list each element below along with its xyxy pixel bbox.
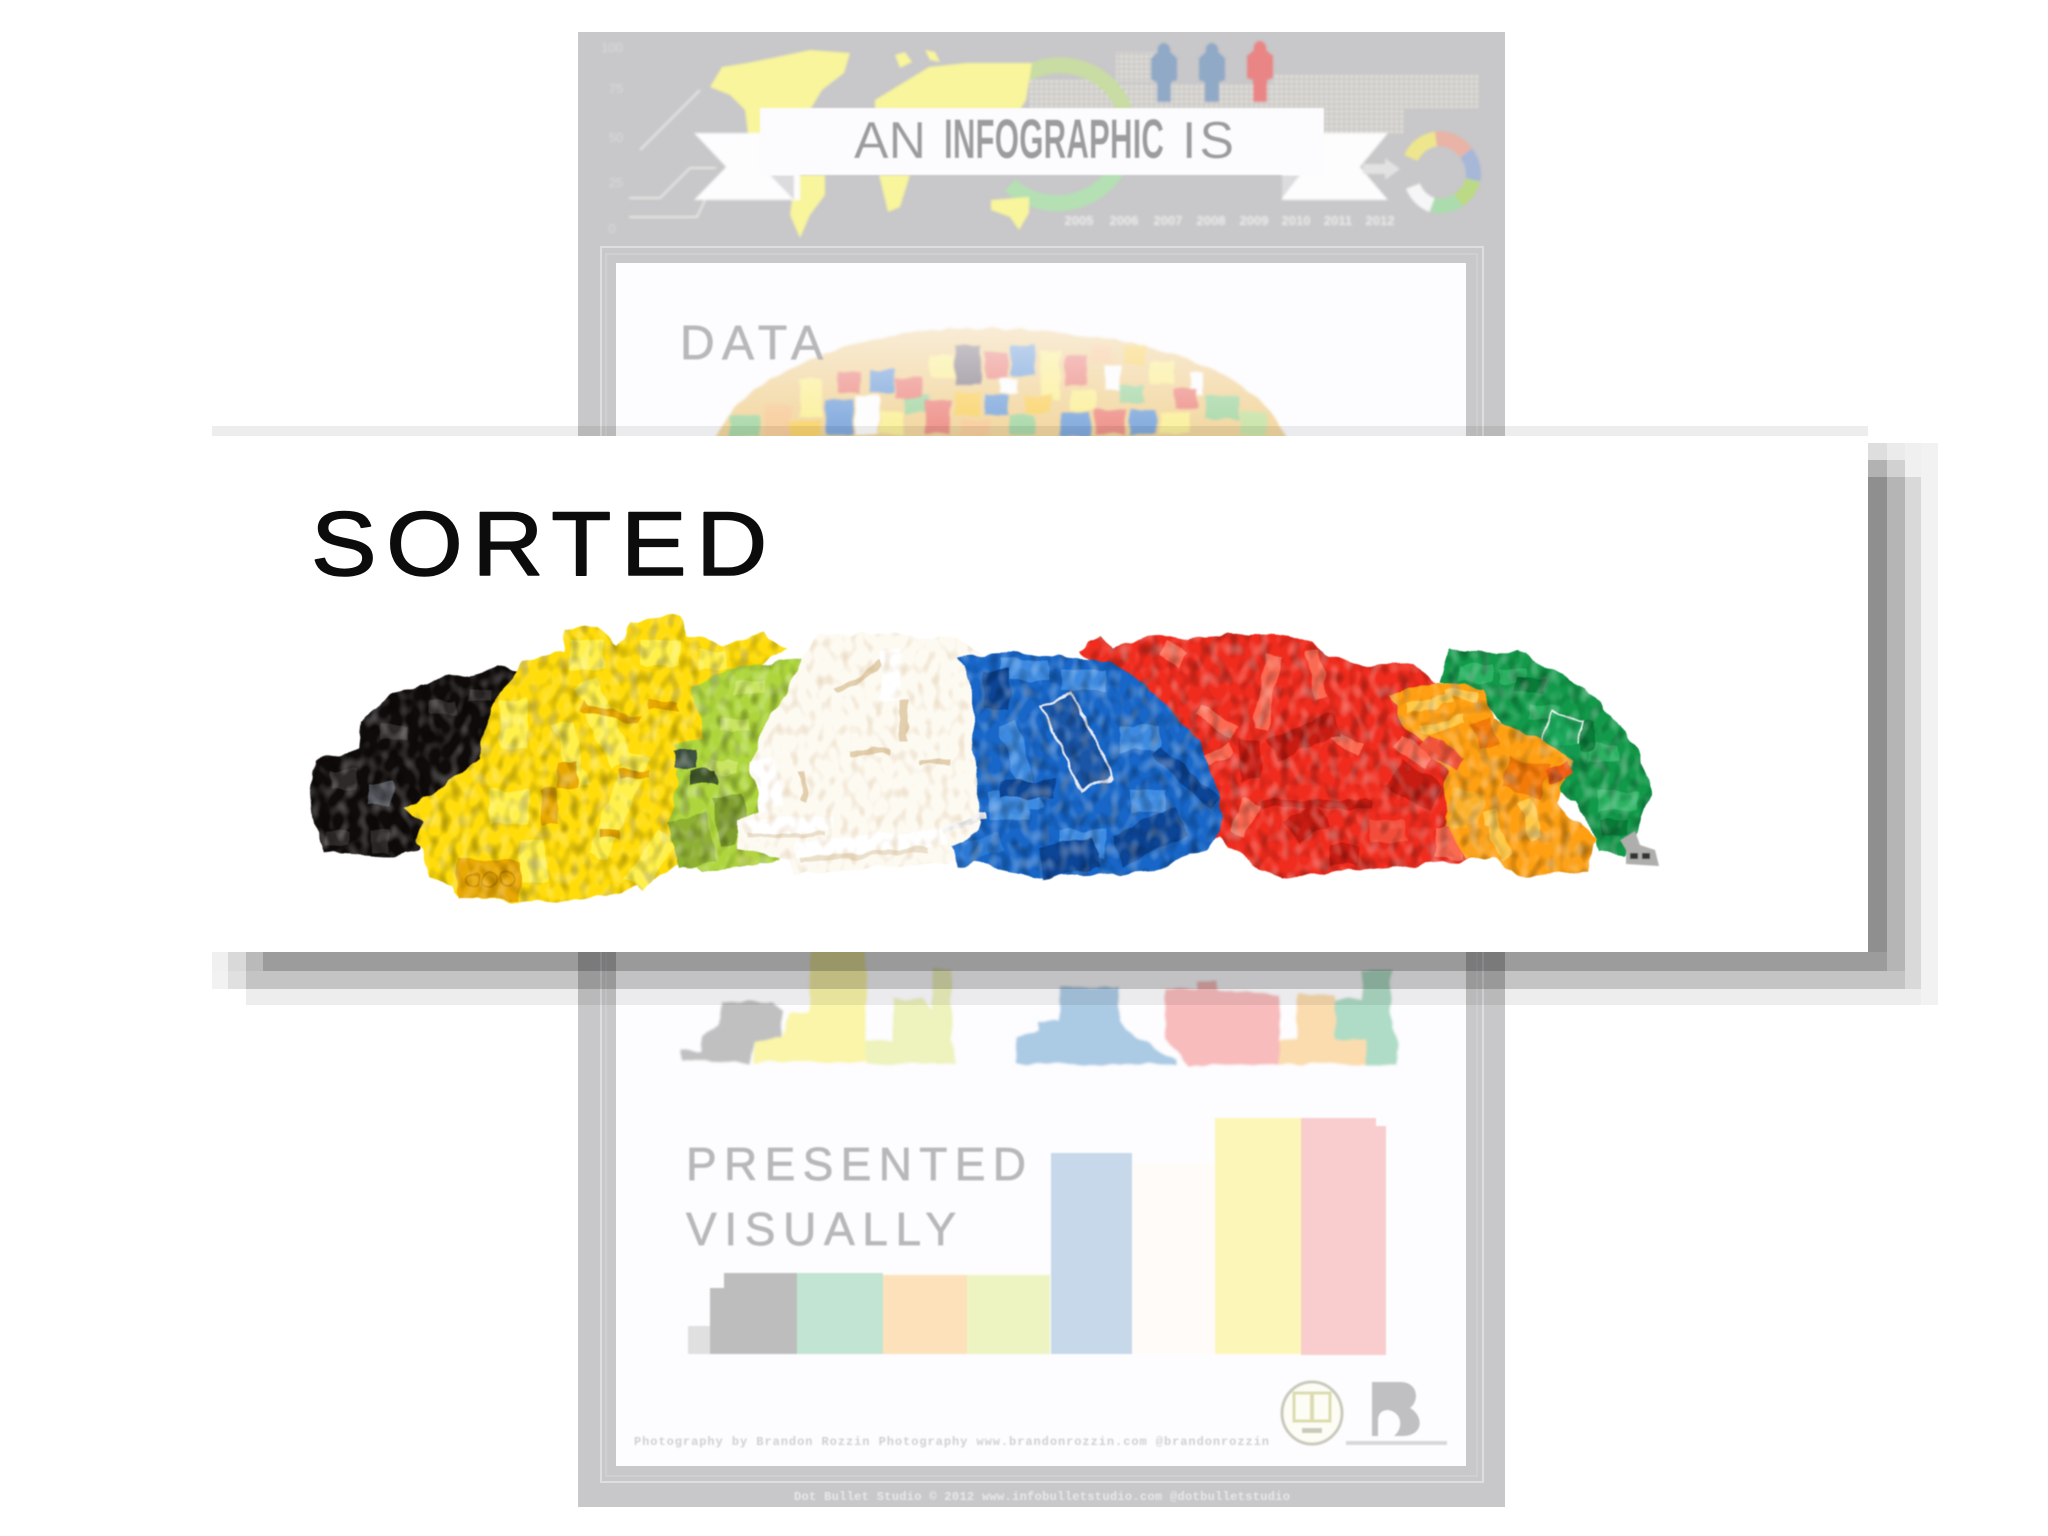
year labels xyxy=(1065,213,1394,228)
year labels: 2011 xyxy=(1324,213,1352,228)
title xyxy=(854,107,1234,170)
logo: round badge xyxy=(1282,1382,1342,1444)
bricks: orange xyxy=(1389,680,1594,877)
bricks: lime xyxy=(667,660,810,873)
axis labels: 50 xyxy=(609,130,623,145)
header graphic xyxy=(601,40,1480,238)
heading: sorted: SORTED xyxy=(311,493,777,595)
bricks: black xyxy=(310,667,535,856)
title: INFOGRAPHIC xyxy=(944,107,1164,170)
logo: B mark xyxy=(1346,1382,1447,1445)
year labels: 2008 xyxy=(1197,213,1225,228)
heading: presented visually: PRESENTED xyxy=(686,1138,1026,1190)
studio credit: Dot Bullet Studio © 2012 www.infobulletstudio.com @dotbulletstudio xyxy=(794,1490,1290,1504)
title: IS xyxy=(1182,112,1234,170)
heading: presented visually: VISUALLY xyxy=(686,1203,956,1255)
bricks: green xyxy=(1439,650,1653,856)
bar chart xyxy=(688,1118,1386,1355)
axis labels: 100 xyxy=(601,40,623,55)
background poster panel xyxy=(578,32,1505,1507)
year labels: 2007 xyxy=(1154,213,1182,228)
ribbon tails xyxy=(694,133,1388,200)
year labels: 2010 xyxy=(1282,213,1310,228)
title: AN xyxy=(854,112,926,170)
world map xyxy=(710,50,1032,238)
circuit lines xyxy=(629,90,716,217)
donut chart xyxy=(1411,139,1473,206)
photographer credit: Photography by Brandon Rozzin Photography www.brandonrozzin.com @brandonrozzin xyxy=(634,1435,1269,1449)
year labels: 2009 xyxy=(1240,213,1268,228)
year labels: 2006 xyxy=(1110,213,1138,228)
bricks: white xyxy=(737,634,995,875)
axis labels: 75 xyxy=(609,81,623,96)
heading: data: DATA xyxy=(680,317,823,370)
bricks: red xyxy=(1078,634,1490,879)
faded sorted towers xyxy=(682,950,1400,1066)
main panel: sorted xyxy=(184,436,1868,952)
axis labels xyxy=(601,40,623,236)
population figures xyxy=(1151,41,1273,102)
green ring xyxy=(1010,65,1127,203)
bricks: gray xyxy=(1620,831,1659,866)
heading: presented visually xyxy=(686,1138,1026,1255)
year labels: 2012 xyxy=(1366,213,1394,228)
bricks: yellow xyxy=(404,617,786,902)
inner frame xyxy=(601,247,1483,1482)
year labels: 2005 xyxy=(1065,213,1093,228)
panel drop shadow xyxy=(212,426,1938,1005)
sorted brick piles xyxy=(310,617,1659,902)
axis labels: 0 xyxy=(608,221,616,236)
arrow xyxy=(1363,158,1400,180)
faded unsorted brick pile xyxy=(710,325,1290,440)
bricks: blue xyxy=(940,653,1224,879)
axis labels: 25 xyxy=(609,175,623,190)
dot map xyxy=(1029,52,1480,134)
title ribbon xyxy=(760,107,1324,175)
